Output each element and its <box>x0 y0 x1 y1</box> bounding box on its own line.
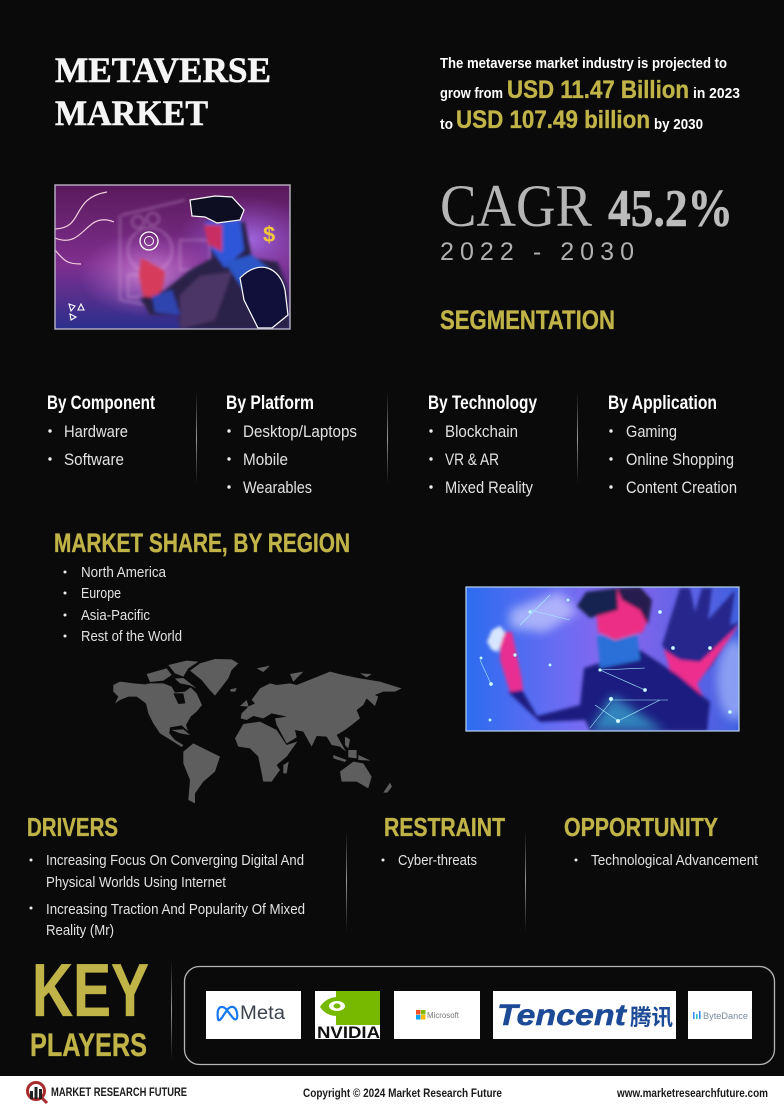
region list: Rest of the World <box>81 628 182 645</box>
market projection text: in 2023 <box>693 85 740 102</box>
column: by platform <box>226 393 357 497</box>
dollar sign: $ <box>263 222 275 247</box>
neon squiggles <box>55 192 114 264</box>
drivers list: Reality (Mr) <box>46 922 114 939</box>
region list: North America <box>81 564 167 581</box>
eurasia <box>241 672 402 752</box>
market projection text: by 2030 <box>654 116 703 133</box>
market projection text: USD 107.49 billion <box>456 106 650 134</box>
column: by platform: Wearables <box>243 478 312 497</box>
column: by application: Gaming <box>626 422 677 441</box>
drivers list: Increasing Focus On Converging Digital And <box>46 852 304 869</box>
title: MARKET <box>55 93 208 133</box>
logo: Microsoft: Microsoft <box>427 1011 460 1020</box>
head <box>595 588 650 640</box>
CAGR: CAGR <box>440 173 592 239</box>
footer <box>0 1076 784 1108</box>
market projection text: USD 11.47 Billion <box>507 76 689 104</box>
market projection text: to <box>440 116 453 133</box>
image: VR user with holographic interface <box>55 185 290 329</box>
column: by component: Software <box>64 450 124 469</box>
logo: ByteDance <box>688 991 752 1039</box>
column: by application: Content Creation <box>626 478 737 497</box>
left hand <box>500 632 523 692</box>
heading: drivers: DRIVERS <box>27 812 118 842</box>
network glow <box>590 695 665 731</box>
person silhouette <box>139 220 290 329</box>
triangles <box>69 304 84 320</box>
key players heading: PLAYERS <box>30 1027 147 1063</box>
logo icon: market research future <box>28 1082 47 1103</box>
column: by application <box>608 393 737 497</box>
logo: Meta <box>206 991 301 1039</box>
key players panel <box>184 966 774 1064</box>
logo: NVIDIA <box>315 991 380 1042</box>
africa <box>235 722 297 782</box>
australia and islands <box>340 762 372 788</box>
column: by platform: Mobile <box>243 450 288 469</box>
logo: Meta: Meta <box>240 1003 285 1024</box>
market projection text: The metaverse market industry is projected to <box>440 55 727 72</box>
CAGR <box>440 173 733 266</box>
column: by technology: Mixed Reality <box>445 478 533 497</box>
key players heading <box>30 948 149 1063</box>
headset <box>190 196 244 223</box>
column: by component: Hardware <box>64 422 128 441</box>
heading: restraint: RESTRAINT <box>384 812 505 842</box>
logo: Tencent: 腾讯 <box>630 1005 673 1030</box>
region list: Asia-Pacific <box>81 607 150 624</box>
opportunity list: Technological Advancement <box>591 852 759 869</box>
column: by component <box>47 393 156 469</box>
column: by component: By Component <box>47 393 156 414</box>
hologram glow <box>510 592 578 632</box>
market projection text: grow from <box>440 85 503 102</box>
heading: market share by region: MARKET SHARE, BY REGION <box>54 528 350 558</box>
footer brand: MARKET RESEARCH FUTURE <box>51 1085 187 1099</box>
CAGR: 45.2% <box>608 180 733 238</box>
title: METAVERSE <box>55 50 271 90</box>
column: by platform: By Platform <box>226 393 314 414</box>
raised right hand <box>660 588 738 671</box>
neck <box>597 632 640 668</box>
logo: ByteDance: ByteDance <box>703 1011 748 1021</box>
logo: Tencent: Tencent <box>497 999 628 1032</box>
market projection text <box>440 55 740 134</box>
CAGR: 2022 - 2030 <box>440 238 634 266</box>
restraint list: Cyber-threats <box>398 852 477 869</box>
south america <box>183 743 220 803</box>
north america <box>113 682 202 747</box>
title <box>55 50 271 133</box>
drivers list: Increasing Traction And Popularity Of Mixed <box>46 901 305 918</box>
logo: Microsoft <box>394 991 480 1039</box>
column: by technology: Blockchain <box>445 422 518 441</box>
world map <box>113 659 402 803</box>
logo: Tencent <box>493 991 676 1039</box>
column: by technology <box>428 393 537 497</box>
heading: segmentation: SEGMENTATION <box>440 305 615 335</box>
greenland <box>190 659 238 696</box>
column: by technology: VR & AR <box>445 450 499 469</box>
drivers list: Physical Worlds Using Internet <box>46 874 227 891</box>
holographic panel <box>120 200 210 315</box>
logo: NVIDIA: NVIDIA <box>317 1023 380 1042</box>
footer copyright: Copyright © 2024 Market Research Future <box>303 1086 502 1100</box>
image: woman in VR headset with network <box>466 587 753 731</box>
column: by application: Online Shopping <box>626 450 734 469</box>
column: by platform: Desktop/Laptops <box>243 422 357 441</box>
region list <box>64 564 182 645</box>
heading: opportunity: OPPORTUNITY <box>564 812 718 842</box>
key players heading: KEY <box>32 948 149 1032</box>
column: by application: By Application <box>608 393 717 414</box>
region list: Europe <box>81 585 121 602</box>
column: by technology: By Technology <box>428 393 537 414</box>
body <box>508 650 710 731</box>
drivers list <box>30 852 305 939</box>
